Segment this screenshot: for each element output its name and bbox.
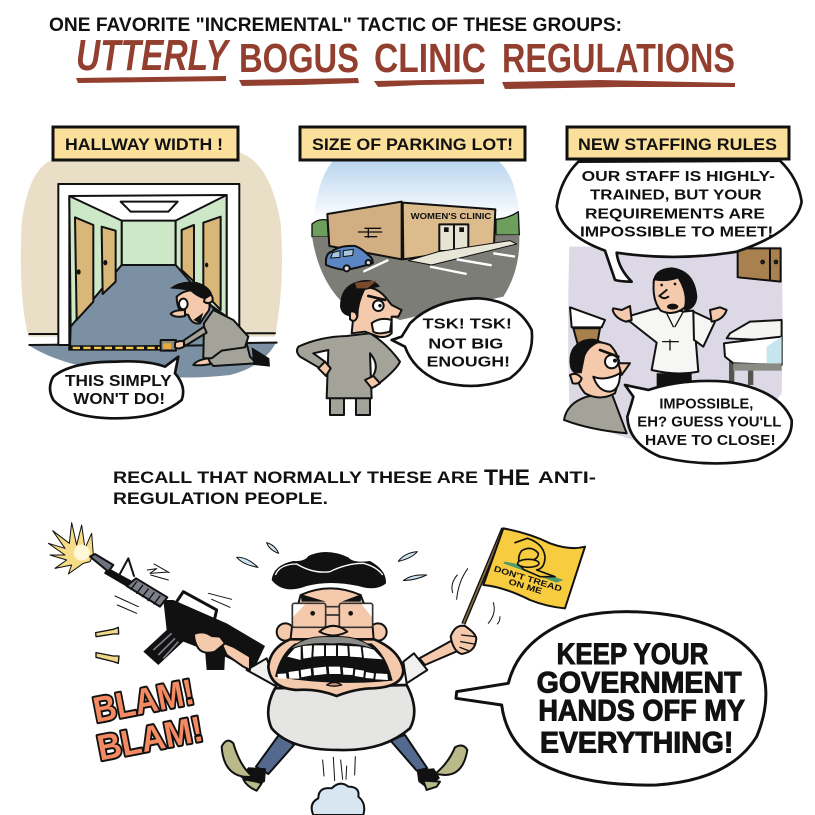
exam table <box>724 320 782 385</box>
top speech bubble: OUR STAFF IS HIGHLY- <box>582 168 775 185</box>
sound effect: blam <box>90 671 206 768</box>
assault rifle <box>90 554 265 671</box>
ceiling light <box>121 202 178 212</box>
left doors <box>75 217 116 320</box>
man with hands on hips <box>297 280 402 415</box>
rifle and blam <box>48 523 277 768</box>
clinic doors <box>439 224 468 251</box>
floor <box>28 342 277 377</box>
speech bubble: TSK! TSK! <box>423 316 512 332</box>
top speech bubble <box>557 161 802 282</box>
label: parking lot <box>300 127 525 160</box>
speech bubble <box>392 298 532 386</box>
muzzle flash <box>48 523 93 574</box>
shell casings <box>96 627 119 663</box>
sweat drops <box>237 543 427 581</box>
jump lines <box>323 757 355 781</box>
flag wave marks <box>452 569 500 624</box>
top speech bubble: TRAINED, BUT YOUR <box>590 186 762 203</box>
motion marks <box>115 564 232 613</box>
title: CLINIC <box>374 35 486 81</box>
upper teeth <box>287 645 383 660</box>
speech bubble: THIS SIMPLY <box>65 373 172 390</box>
man kneeling <box>170 282 270 367</box>
bottom speech bubble: IMPOSSIBLE, <box>659 396 753 412</box>
parking lot surface <box>312 235 519 320</box>
grass <box>503 562 563 583</box>
sound effect: blam: BLAM! <box>90 671 197 730</box>
caption: anti-regulation <box>113 465 596 508</box>
left wall <box>69 196 122 328</box>
dust cloud <box>312 784 364 815</box>
panel: parking lot <box>297 161 532 415</box>
caption: anti-regulation: RECALL THAT NORMALLY THESE ARE <box>113 468 478 487</box>
room wall <box>568 247 782 453</box>
speech bubble <box>50 357 183 418</box>
top speech bubble: IMPOSSIBLE TO MEET! <box>580 224 773 241</box>
flash glow <box>74 545 90 561</box>
corridor <box>69 195 227 347</box>
sky <box>313 161 520 220</box>
hat <box>272 552 386 589</box>
paper shelf <box>570 307 605 347</box>
nose <box>319 626 347 635</box>
title <box>76 31 735 89</box>
sound effect: blam: BLAM! <box>94 708 206 768</box>
coiled snake <box>515 538 555 577</box>
title: BOGUS <box>239 35 359 81</box>
right arm and flag hand <box>403 528 503 683</box>
head <box>268 552 403 696</box>
panel: staffing rules <box>557 161 802 463</box>
trees <box>312 212 519 237</box>
hallway carpet <box>70 265 227 347</box>
title: UTTERLY <box>76 31 231 80</box>
big speech bubble <box>456 612 766 785</box>
intro line: ONE FAVORITE "INCREMENTAL" TACTIC OF THESE GROUPS: <box>49 15 622 36</box>
label: hallway width <box>53 127 238 160</box>
blue car <box>326 246 373 271</box>
forehead and cheeks <box>290 588 374 644</box>
clinic doctor <box>613 267 727 387</box>
legs <box>256 733 427 774</box>
flag text: DON'T TREAD <box>493 563 563 594</box>
panel: hallway width <box>21 152 282 418</box>
forearm and sleeve <box>194 632 277 687</box>
mouth <box>275 643 393 683</box>
jowls <box>268 639 403 696</box>
speech bubble: ENOUGH! <box>427 355 510 371</box>
bottom speech bubble <box>625 381 792 463</box>
big speech bubble: EVERYTHING! <box>540 727 733 760</box>
panel background wall <box>21 152 282 337</box>
wall crack <box>358 228 382 237</box>
big speech bubble: KEEP YOUR <box>557 638 709 671</box>
label: staffing rules: NEW STAFFING RULES <box>578 135 777 154</box>
top speech bubble: REQUIREMENTS ARE <box>585 205 765 222</box>
sidewalk <box>408 241 517 265</box>
glasses <box>292 603 373 627</box>
eyebrows <box>301 594 362 602</box>
angry man with tricorn hat <box>222 528 503 815</box>
label: staffing rules <box>567 127 789 159</box>
chin dimple <box>327 682 342 686</box>
bottom speech bubble: HAVE TO CLOSE! <box>645 433 776 449</box>
caption: anti-regulation: ANTI- <box>538 468 596 487</box>
bottom speech bubble: EH? GUESS YOU'LL <box>637 415 781 431</box>
belly <box>268 685 414 750</box>
caption: anti-regulation: THE <box>484 465 530 490</box>
moustache <box>290 636 374 649</box>
big speech bubble: HANDS OFF MY <box>538 695 745 728</box>
parking lines <box>363 253 515 274</box>
lower teeth <box>277 667 388 680</box>
title: REGULATIONS <box>502 35 735 81</box>
caption: anti-regulation: REGULATION PEOPLE. <box>113 489 328 508</box>
tape measure <box>68 340 176 351</box>
label: hallway width: HALLWAY WIDTH ! <box>65 135 223 154</box>
label: parking lot: SIZE OF PARKING LOT! <box>312 135 513 154</box>
cabinet <box>738 248 781 282</box>
clinic building <box>327 202 517 265</box>
door knobs <box>77 260 208 275</box>
speech bubble: WON'T DO! <box>73 391 165 408</box>
right doors <box>182 217 221 310</box>
baseboard lines <box>29 333 277 345</box>
back wall <box>122 221 176 265</box>
shoes <box>222 741 467 791</box>
inspector man grinning <box>564 339 630 433</box>
ears <box>277 623 294 641</box>
right wall <box>176 195 227 317</box>
gadsden flag: ON ME <box>507 576 544 596</box>
door frame <box>58 184 239 345</box>
clinic sign: WOMEN'S CLINIC <box>411 211 492 221</box>
speech bubble: NOT BIG <box>428 336 503 352</box>
gadsden flag <box>483 528 585 608</box>
big speech bubble: GOVERNMENT <box>537 667 742 700</box>
